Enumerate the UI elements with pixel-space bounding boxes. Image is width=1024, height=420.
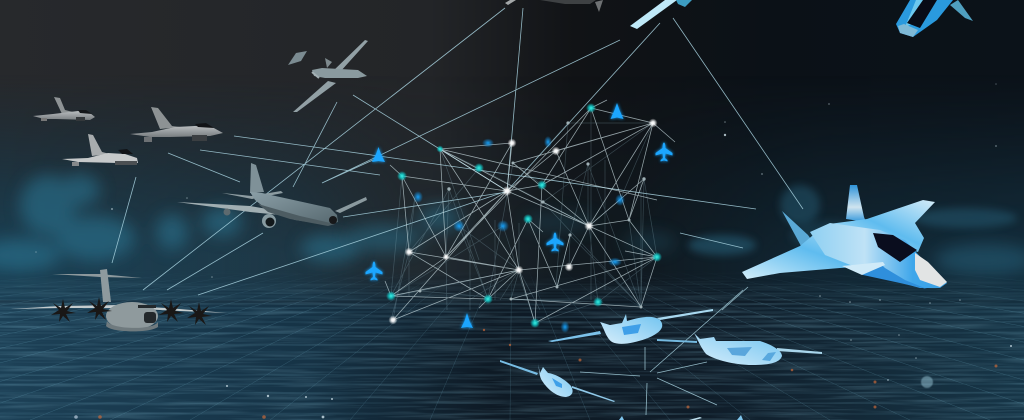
network nodes: teal relays [386,103,662,328]
network nodes: small grey relays [418,121,646,309]
canopy [873,233,917,262]
icon: plane top [610,103,624,119]
aircraft: A330 tanker [177,163,367,228]
nose [915,253,947,287]
propeller 1 [51,299,76,322]
long datalink lines between platforms and the network [112,8,803,415]
aircraft: loyal wingman drone 1 [548,309,713,344]
icon: plane right [656,142,672,162]
aircraft: A400M transport [10,269,227,331]
left wing [742,225,885,279]
icon: plane lower left [366,262,382,280]
network mesh: faint links [391,108,657,323]
satellite: top centre [630,0,692,29]
background: low atmospheric haze [0,126,1024,300]
icon: plane bottom [461,313,473,328]
aircraft: fighter jet lower left [62,134,138,166]
clouds: centre bank [347,204,676,252]
aircraft: loyal wingman drone 3 [500,360,615,402]
aircraft: high altitude platform at top [505,0,603,12]
network mesh: bright links [385,100,675,323]
swarm icons: blue aircraft markers [366,103,672,328]
far fin [782,211,815,246]
ocean surface [0,270,1024,420]
right wing [829,200,935,252]
propeller 4 [187,302,212,325]
propeller 3 [159,299,184,322]
aircraft: fighter jet upper centre [130,107,223,142]
aircraft: MALE drone [288,40,368,112]
lower fuselage [853,263,927,289]
icon: plane left top [372,147,385,162]
lower fairing [842,262,885,275]
stars and sparkles [35,83,1012,418]
more swarm aircraft at the bottom edge [619,415,743,420]
ocean digital grid [0,278,1024,420]
clouds: left bank [0,174,360,271]
centre fuselage [810,223,947,288]
aircraft: loyal wingman drone 2 [657,333,822,365]
aircraft: next generation fighter [742,185,947,289]
glowing beacon on the sea [921,376,933,388]
swarm icons: distant blurred markers [413,136,625,333]
network nodes: white hubs [388,118,658,324]
tail fin [846,185,866,222]
propeller 2 [87,297,112,320]
icon: plane centre [546,232,564,252]
ocean ground markers [74,329,997,419]
aircraft: fighter jet upper left [33,97,95,121]
satellite: top right [896,0,973,37]
clouds: right bank [688,185,1024,276]
